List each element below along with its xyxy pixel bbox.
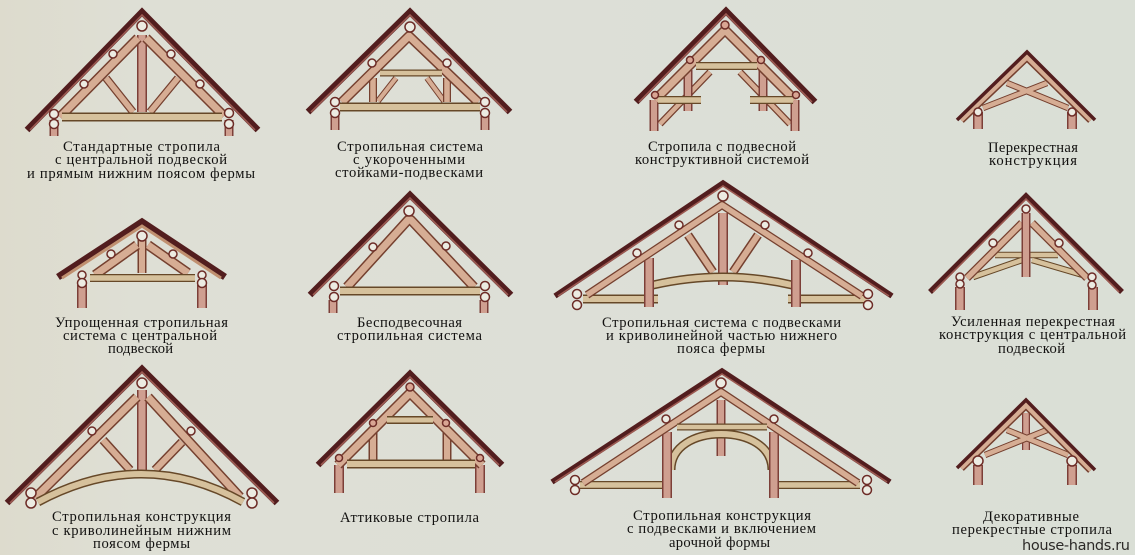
- watermark: house-hands.ru: [1022, 538, 1130, 554]
- caption 6: стропильная система: [337, 328, 483, 344]
- panel: cross structure: [957, 52, 1095, 169]
- caption 6: Бесподвесочная: [357, 315, 462, 331]
- caption 7: и криволинейной частью нижнего: [606, 328, 837, 344]
- caption 12: Декоративные: [983, 509, 1079, 525]
- truss diagram 2: [308, 12, 510, 130]
- caption 12: [952, 509, 1113, 538]
- panel: simplified central suspension: [55, 222, 228, 357]
- caption 8: подвеской: [998, 341, 1065, 357]
- panel: shortened posts: [308, 12, 510, 181]
- caption 3: [635, 139, 809, 168]
- caption 7: [602, 315, 841, 357]
- caption 11: [627, 508, 816, 551]
- caption 11: арочной формы: [669, 535, 770, 551]
- caption 4: [988, 140, 1078, 169]
- caption 3: конструктивной системой: [635, 152, 809, 168]
- caption 7: Стропильная система с подвесками: [602, 315, 841, 331]
- truss diagram 3: [636, 11, 815, 131]
- panel: standard rafters: [27, 12, 258, 182]
- caption 5: Упрощенная стропильная: [55, 315, 228, 331]
- caption 4: Перекрестная: [988, 140, 1078, 156]
- panel: suspended structural system: [635, 11, 815, 168]
- caption 11: Стропильная конструкция: [633, 508, 811, 524]
- caption 9: Стропильная конструкция: [52, 509, 231, 525]
- truss diagram 5: [58, 222, 225, 308]
- caption 8: [939, 314, 1126, 357]
- caption 1: [27, 139, 255, 182]
- caption 8: Усиленная перекрестная: [951, 314, 1115, 330]
- caption 9: с криволинейным нижним: [52, 523, 231, 539]
- truss diagram 12: [957, 400, 1095, 485]
- caption 4: конструкция: [989, 153, 1077, 169]
- panel: curved lower chord with suspensions: [555, 183, 892, 357]
- truss diagram 4: [957, 52, 1095, 129]
- caption 3: Стропила с подвесной: [648, 139, 796, 155]
- truss diagram 10: [318, 374, 502, 493]
- caption 1: с центральной подвеской: [55, 152, 227, 168]
- caption 9: [52, 509, 231, 552]
- caption 1: и прямым нижним поясом фермы: [27, 166, 255, 182]
- caption 7: пояса фермы: [677, 341, 765, 357]
- panel: no-suspension system: [310, 195, 511, 344]
- caption 11: с подвесками и включением: [627, 521, 816, 537]
- truss diagram 6: [310, 195, 511, 313]
- caption 5: система с центральной: [63, 328, 217, 344]
- truss diagram 7: [555, 183, 892, 310]
- panel: attic rafters: [318, 374, 502, 526]
- caption 6: [337, 315, 483, 344]
- caption 12: перекрестные стропила: [952, 522, 1113, 538]
- caption 9: поясом фермы: [93, 536, 190, 552]
- panel: curved lower chord: [7, 369, 277, 552]
- caption 1: Стандартные стропила: [63, 139, 221, 155]
- truss diagram 9: [7, 369, 277, 508]
- truss diagram 8: [930, 196, 1122, 310]
- caption 5: подвеской: [108, 341, 173, 357]
- caption 2: [335, 139, 484, 181]
- panel: arched form: [552, 371, 890, 551]
- caption 2: с укороченными: [353, 152, 465, 168]
- caption 10: Аттиковые стропила: [340, 510, 480, 526]
- truss diagram 1: [27, 12, 258, 136]
- caption 5: [55, 315, 228, 357]
- panel: decorative cross rafters: [952, 400, 1113, 538]
- truss diagram 11: [552, 371, 890, 498]
- panel: reinforced cross with central suspension: [930, 196, 1126, 357]
- caption 2: Стропильная система: [337, 139, 484, 155]
- caption 8: конструкция с центральной: [939, 327, 1126, 343]
- caption 2: стойками-подвесками: [335, 165, 483, 181]
